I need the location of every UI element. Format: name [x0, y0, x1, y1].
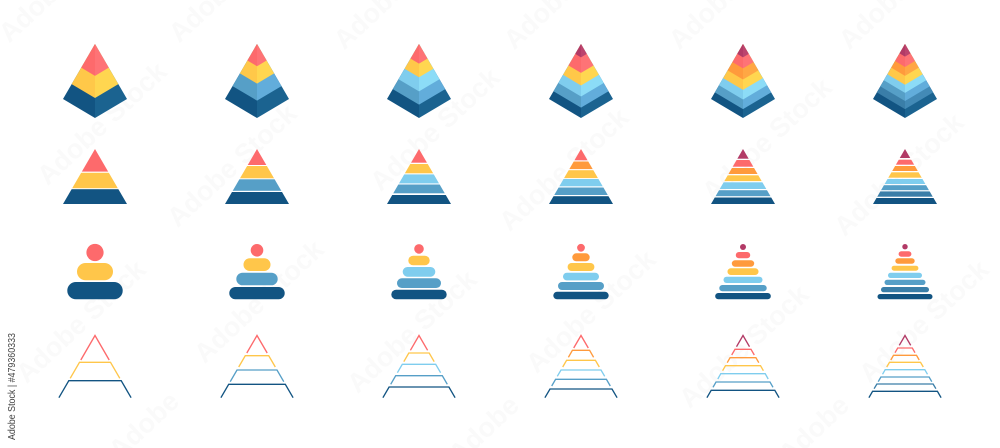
isometric pyramid, 5 levels [387, 44, 451, 118]
watermark pattern: Adobe Stock [364, 62, 506, 197]
row: stacking-ring pyramids [67, 244, 933, 299]
watermark pattern: Adobe Stock [853, 254, 995, 389]
watermark pattern: Adobe Stock [828, 107, 970, 242]
isometric pyramid, 8 levels [873, 44, 937, 118]
watermark pattern: Adobe Stock [341, 264, 483, 399]
outline pyramid, 5 levels [383, 336, 455, 398]
watermark pattern: Adobe Stock [673, 279, 815, 414]
watermark pattern: Adobe Stock [188, 234, 330, 369]
flat pyramid, 3 levels [63, 149, 127, 204]
isometric pyramid, 6 levels [549, 44, 613, 118]
ring stack, 7 levels [715, 244, 771, 299]
watermark pattern: Adobe Stock [161, 98, 303, 233]
flat pyramid, 4 levels [225, 149, 289, 204]
outline pyramid, 8 levels [869, 336, 941, 398]
stock credit: Adobe Stock | #479360333 [6, 333, 18, 440]
row: outline pyramids [59, 336, 941, 398]
watermark pattern: Adobe Stock [493, 102, 635, 237]
outline pyramid, 4 levels [221, 336, 293, 398]
ring stack, 3 levels [67, 244, 123, 299]
outline pyramid, 6 levels [545, 336, 617, 398]
ring stack, 8 levels [878, 244, 932, 299]
row: isometric pyramids [63, 44, 937, 118]
isometric pyramid, 7 levels [711, 44, 775, 118]
row: flat banded pyramids [63, 149, 937, 204]
watermark pattern: Adobe Stock [520, 244, 662, 379]
flat pyramid, 8 levels [873, 149, 937, 204]
watermark pattern: Adobe Stock [696, 72, 838, 207]
isometric pyramid, 3 levels [63, 44, 127, 118]
ring stack, 5 levels [391, 244, 447, 299]
isometric pyramid, 4 levels [225, 44, 289, 118]
flat pyramid, 7 levels [711, 149, 775, 204]
outline pyramid, 7 levels [707, 336, 779, 398]
ring stack, 4 levels [229, 244, 285, 299]
flat pyramid, 5 levels [387, 149, 451, 204]
outline pyramid, 3 levels [59, 336, 131, 398]
watermark pattern: Adobe Stock [31, 56, 173, 191]
watermark pattern: Adobe Stock [10, 254, 152, 389]
flat pyramid, 6 levels [549, 149, 613, 204]
ring stack, 6 levels [553, 244, 609, 299]
